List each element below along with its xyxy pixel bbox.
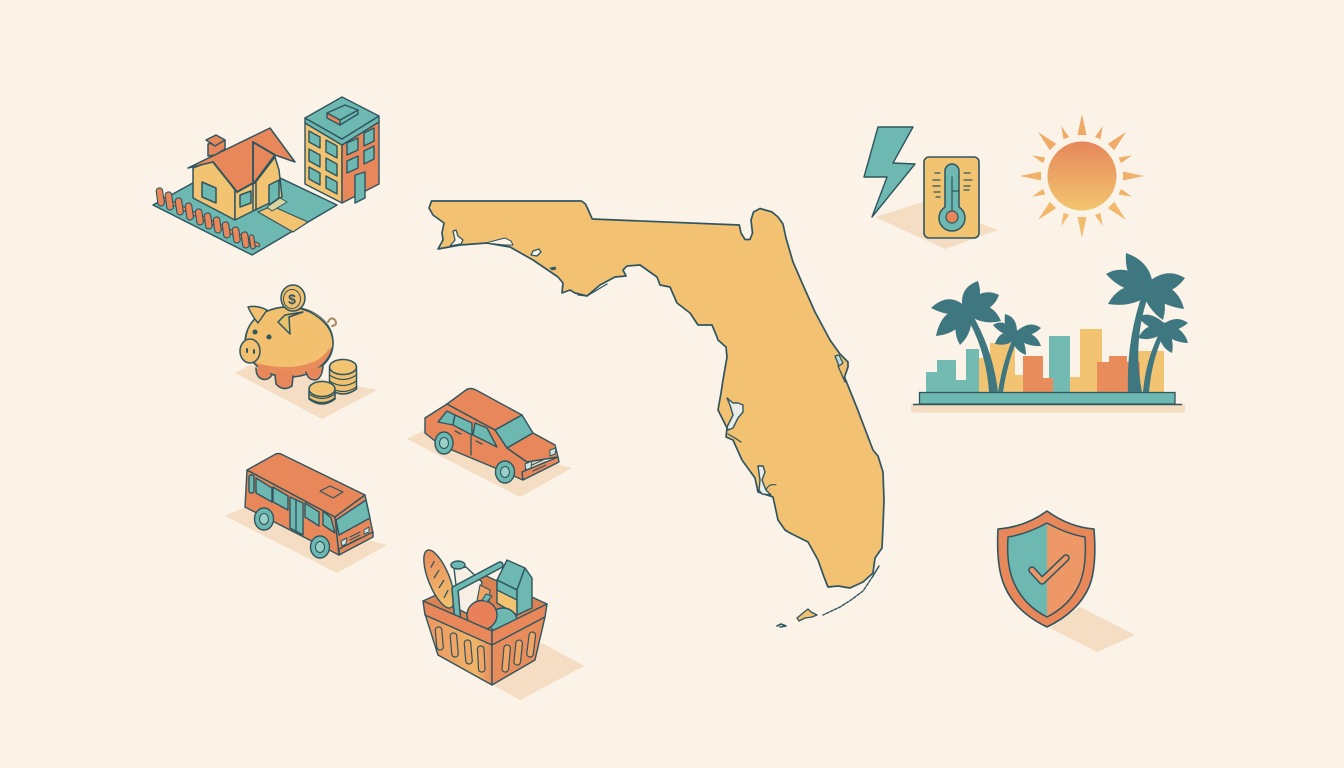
base platform [920, 392, 1175, 404]
apple stem [482, 594, 492, 602]
Choctawhatchee bay [486, 238, 513, 245]
fence rail fill [160, 197, 258, 245]
door [290, 497, 303, 535]
bottle cap [451, 561, 465, 569]
short stack top [309, 382, 335, 396]
icon: bus [225, 454, 387, 573]
shield right half [1047, 523, 1085, 617]
thermometer mercury [946, 211, 958, 223]
coin symbol: $ [288, 291, 296, 307]
shield inner outline [1008, 523, 1085, 617]
basket rim left [423, 601, 492, 645]
left window [202, 182, 216, 203]
left ticks [933, 173, 940, 197]
handle fill [455, 565, 500, 624]
Tampa Bay [727, 398, 743, 430]
body top [246, 308, 332, 367]
fence pickets [156, 188, 255, 249]
box behind [476, 585, 490, 612]
door split [295, 500, 297, 531]
window 4 [323, 511, 335, 533]
shadow [493, 643, 584, 700]
bottle [450, 567, 482, 615]
St Joseph marks [550, 267, 556, 270]
roof band [305, 116, 379, 145]
tall coin stack [330, 368, 356, 394]
right wall [235, 157, 282, 220]
window 2 [453, 415, 472, 435]
thermometer card [924, 157, 979, 238]
tall stack top [330, 360, 356, 374]
map: Florida [429, 201, 884, 627]
nostrils [247, 349, 254, 353]
headlight right [364, 527, 369, 534]
chimney cap [206, 135, 225, 146]
rear window [249, 475, 254, 493]
shield left half [1008, 523, 1047, 617]
check outline [1032, 558, 1066, 581]
sun rays [1020, 114, 1144, 238]
right ticks [964, 173, 972, 190]
fence rails [160, 197, 258, 245]
coin slot [278, 312, 303, 334]
grille [532, 459, 546, 471]
icon: sun [1020, 114, 1144, 238]
headlights [525, 461, 532, 470]
Caloosahatchee river [766, 485, 776, 490]
door [269, 180, 279, 205]
barrier line [838, 366, 845, 382]
legs [256, 366, 323, 389]
left slots [435, 627, 485, 672]
door step [267, 198, 287, 211]
door lines [455, 431, 482, 455]
window 1 [256, 478, 272, 502]
headlight right [550, 448, 556, 456]
Cape San Blas barrier [578, 284, 607, 296]
state outline [429, 201, 884, 588]
front wheel [310, 536, 330, 558]
green fruit [489, 608, 517, 634]
roof ridges [213, 142, 275, 192]
roof [247, 454, 365, 517]
yellow buildings [979, 329, 1164, 392]
mercury stem [952, 177, 958, 211]
walkway [258, 206, 308, 232]
left wall [305, 123, 342, 203]
grille [350, 532, 360, 543]
side window [240, 191, 251, 207]
eyes [253, 330, 257, 334]
palm 1 [931, 281, 1001, 392]
tail [328, 318, 336, 326]
Charlotte Harbor [758, 466, 771, 495]
handle outline [455, 565, 500, 624]
wall corner [253, 182, 256, 210]
right wall [342, 122, 379, 203]
building door [355, 172, 365, 203]
tall stack ridges [330, 375, 356, 392]
body outline upper [245, 307, 333, 366]
icon: car [407, 388, 572, 497]
Key West [777, 624, 786, 627]
coin [281, 285, 305, 311]
thermometer tube [939, 164, 965, 231]
shadow [875, 202, 998, 249]
shadow [1050, 607, 1135, 652]
apple [467, 600, 497, 630]
right slots [502, 632, 536, 672]
shadow [235, 365, 377, 419]
Biscayne barrier [873, 566, 879, 576]
front hub [500, 466, 510, 478]
ground shadow [911, 404, 1185, 412]
icon: palm trees and skyline [911, 253, 1188, 412]
roof [447, 388, 522, 430]
Florida Keys [823, 576, 873, 615]
roof box front [327, 113, 340, 125]
milk carton [497, 560, 532, 615]
ear [248, 306, 267, 323]
left wall [193, 160, 235, 220]
palm 3 [1106, 253, 1185, 392]
roof box side [340, 110, 358, 125]
short coin stack [309, 390, 335, 404]
icon: shield with check [998, 511, 1135, 652]
icon: apartment building [305, 97, 379, 203]
front bumper [522, 457, 559, 480]
lawn [153, 158, 337, 255]
icon: house with fenced yard [153, 128, 337, 255]
roof hatch [320, 486, 343, 498]
right windows [347, 128, 374, 173]
bumper [339, 532, 373, 555]
Big Pine key [797, 609, 817, 621]
body belly [245, 307, 333, 377]
orange buildings [1023, 356, 1140, 392]
front [335, 495, 373, 555]
basket interior [423, 574, 547, 632]
window 2 [273, 487, 288, 510]
lightning bolt [864, 127, 915, 217]
St Andrew bay [531, 249, 541, 256]
hood [507, 433, 558, 462]
shield outer [998, 511, 1095, 627]
windshield [495, 415, 533, 448]
chimney [208, 140, 225, 156]
roof [188, 128, 295, 192]
roof [305, 97, 379, 139]
window 3 [473, 423, 497, 447]
windows [438, 411, 455, 425]
basket left face [425, 614, 492, 685]
palm 4 [1138, 315, 1188, 392]
rear wheel [254, 508, 274, 530]
left windows [309, 131, 337, 194]
rear hub [260, 514, 268, 524]
teal buildings [926, 336, 1070, 392]
icon: piggy bank with coins [235, 285, 377, 419]
Pensacola bay [450, 230, 463, 246]
rear wheel [435, 432, 453, 454]
body side [425, 404, 527, 480]
front hub [316, 542, 324, 552]
palm 2 [993, 314, 1041, 392]
headlights [341, 538, 347, 546]
basket right face [492, 617, 545, 685]
shadow [225, 507, 387, 573]
roof box top [327, 105, 358, 120]
leg fill [258, 366, 321, 380]
basket rim right [492, 604, 547, 645]
rear hub [440, 438, 448, 448]
baguette [418, 546, 460, 612]
icon: grocery basket [418, 546, 584, 700]
shadow [407, 430, 572, 497]
Tampa tributary [728, 434, 741, 442]
coin inner [284, 290, 300, 308]
windshield [336, 500, 370, 535]
front wheel [496, 461, 514, 483]
sun disc [1048, 142, 1116, 210]
side [245, 470, 339, 555]
eye right [267, 335, 271, 339]
short stack ridges [309, 394, 335, 402]
snout [240, 339, 260, 363]
icon: lightning and thermometer [864, 127, 998, 249]
Indian River lagoon [835, 355, 843, 366]
base line [913, 404, 1182, 406]
window 3 [305, 503, 319, 526]
check fill [1032, 558, 1066, 581]
